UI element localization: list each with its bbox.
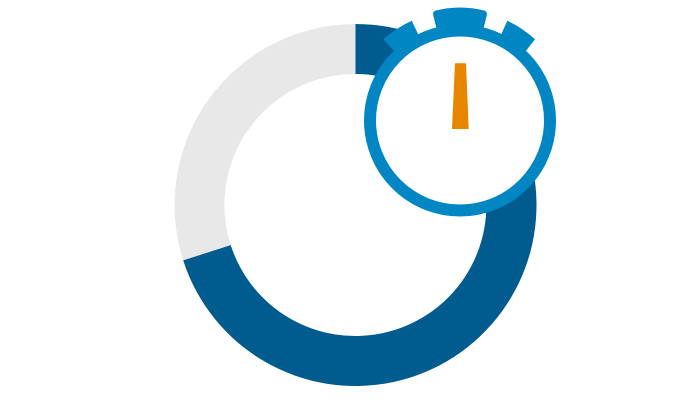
- icon: stopwatch: [370, 8, 550, 210]
- donut chart: [175, 24, 537, 386]
- donut segment: dark blue share: [183, 24, 537, 386]
- stopwatch right lug: [500, 21, 535, 52]
- stopwatch crown: [433, 8, 487, 32]
- stopwatch needle: [452, 63, 469, 129]
- stopwatch left lug: [383, 21, 419, 53]
- stopwatch dial: [370, 30, 550, 210]
- donut segment: grey remainder: [175, 24, 356, 260]
